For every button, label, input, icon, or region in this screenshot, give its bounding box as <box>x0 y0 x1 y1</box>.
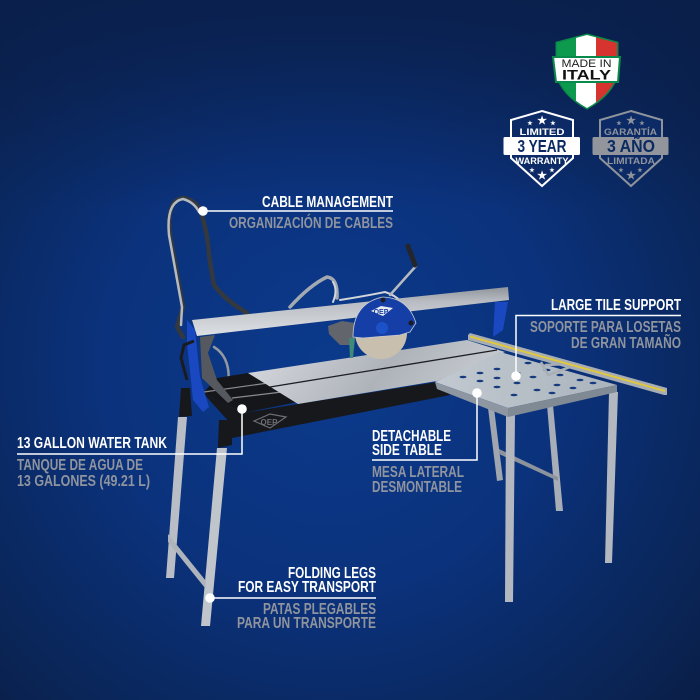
callout: cable management: CABLE MANAGEMENT <box>262 194 393 211</box>
badge: made in Italy <box>553 33 620 111</box>
badge: limited 3 year warranty: ★ <box>537 115 547 127</box>
callout: folding legs: PARA UN TRANSPORTE <box>237 615 376 632</box>
diamond blade <box>355 333 407 359</box>
handle on left frame <box>181 341 194 380</box>
brand mark on tank: QEP <box>261 418 278 427</box>
callout: detachable side table: DETACHABLE <box>372 428 451 445</box>
badge: limited 3 year warranty: ★ <box>537 170 547 182</box>
blade guard <box>353 297 416 338</box>
tile saw product <box>166 198 667 626</box>
badge: limited 3 year warranty: WARRANTY <box>516 156 568 166</box>
guard logo: QEP <box>374 309 389 316</box>
large tile support <box>468 333 667 395</box>
left feet brackets <box>179 388 232 448</box>
badge: limited 3 year warranty: ★ <box>529 167 535 174</box>
callout: folding legs <box>205 565 376 632</box>
green water guide <box>349 338 355 358</box>
callout: water tank: 13 GALLON WATER TANK <box>17 435 168 452</box>
motor <box>328 321 355 345</box>
badge: garantia 3 ano limitada: GARANTÍA <box>604 127 657 138</box>
left blue frame <box>187 320 209 412</box>
callout: cable management <box>198 194 393 232</box>
callout: folding legs: FOR EASY TRANSPORT <box>238 579 376 596</box>
badge: garantia 3 ano limitada: 3 AÑO <box>607 135 655 156</box>
left grey support <box>200 335 233 403</box>
badge: limited 3 year warranty: ★ <box>549 167 555 174</box>
badge: garantia 3 ano limitada: ★ <box>626 170 636 182</box>
callout: detachable side table: SIDE TABLE <box>372 442 442 459</box>
bridge rail <box>192 287 509 336</box>
badge: garantia 3 ano limitada: ★ <box>639 120 645 127</box>
saw handle <box>390 246 416 295</box>
power cable and management arm <box>169 198 414 388</box>
tank front body <box>203 382 450 438</box>
side table top <box>435 352 617 417</box>
callout: folding legs: PATAS PLEGABLES <box>263 601 376 618</box>
folding legs <box>166 417 227 626</box>
badge: limited 3 year warranty: LIMITED <box>520 127 565 138</box>
callout: detachable side table <box>372 388 482 496</box>
callout: folding legs: FOLDING LEGS <box>288 565 376 582</box>
badge: made in Italy: ITALY <box>562 66 612 82</box>
badge: limited 3 year warranty: ★ <box>527 120 533 127</box>
callout: detachable side table: MESA LATERAL <box>372 464 464 481</box>
water tank <box>203 373 298 413</box>
badge: garantia 3 ano limitada: LIMITADA <box>607 156 656 166</box>
callout: large tile support <box>511 297 681 381</box>
badge: garantia 3 ano limitada <box>592 111 668 186</box>
callout: detachable side table: DESMONTABLE <box>372 479 462 496</box>
brand mark on tank <box>254 414 286 428</box>
badge: garantia 3 ano limitada: ★ <box>637 167 643 174</box>
side table legs <box>488 392 618 602</box>
callout: cable management: ORGANIZACIÓN DE CABLES <box>229 214 393 232</box>
badge: limited 3 year warranty: 3 YEAR <box>518 136 567 156</box>
bed groove <box>270 350 497 387</box>
badge: limited 3 year warranty: ★ <box>550 120 556 127</box>
badge: limited 3 year warranty <box>504 111 580 186</box>
badge: made in Italy: MADE IN <box>562 58 612 70</box>
callout: water tank: TANQUE DE AGUA DE <box>17 457 143 474</box>
badge: garantia 3 ano limitada: ★ <box>618 167 624 174</box>
tank dividers <box>204 383 282 398</box>
callout: water tank: 13 GALONES (49.21 L) <box>17 473 150 490</box>
badge: garantia 3 ano limitada: ★ <box>626 115 636 127</box>
support clamp <box>541 362 575 375</box>
cutting bed <box>248 340 505 404</box>
callout: water tank <box>17 404 247 490</box>
right blue upright <box>493 302 508 337</box>
guard logo <box>371 298 414 334</box>
badge: garantia 3 ano limitada: ★ <box>616 120 622 127</box>
